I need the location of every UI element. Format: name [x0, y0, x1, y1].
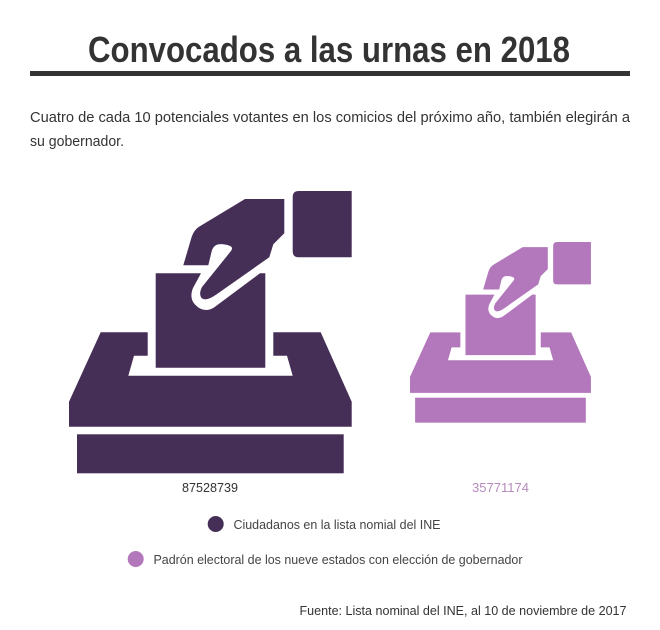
value: citizens on nominal list: 87528739	[182, 480, 238, 495]
legend: citizens on nominal list: Ciudadanos en la lista nomial del INE	[234, 517, 441, 532]
intro text: Cuatro de cada 10 potenciales votantes en los comicios del próximo año, también elegirán a	[30, 109, 631, 126]
intro text: su gobernador.	[30, 133, 124, 150]
legend: nine states electoral roll: Padrón electoral de los nueve estados con elección de gobernador	[154, 552, 523, 567]
value: nine states electoral roll: 35771174	[472, 480, 529, 495]
title: Convocados a las urnas en 2018	[88, 29, 570, 70]
icon: large ballot box	[69, 191, 352, 473]
intro text	[30, 109, 631, 150]
source note: Fuente: Lista nominal del INE, al 10 de noviembre de 2017	[300, 603, 626, 618]
icon: small ballot box	[410, 242, 591, 423]
